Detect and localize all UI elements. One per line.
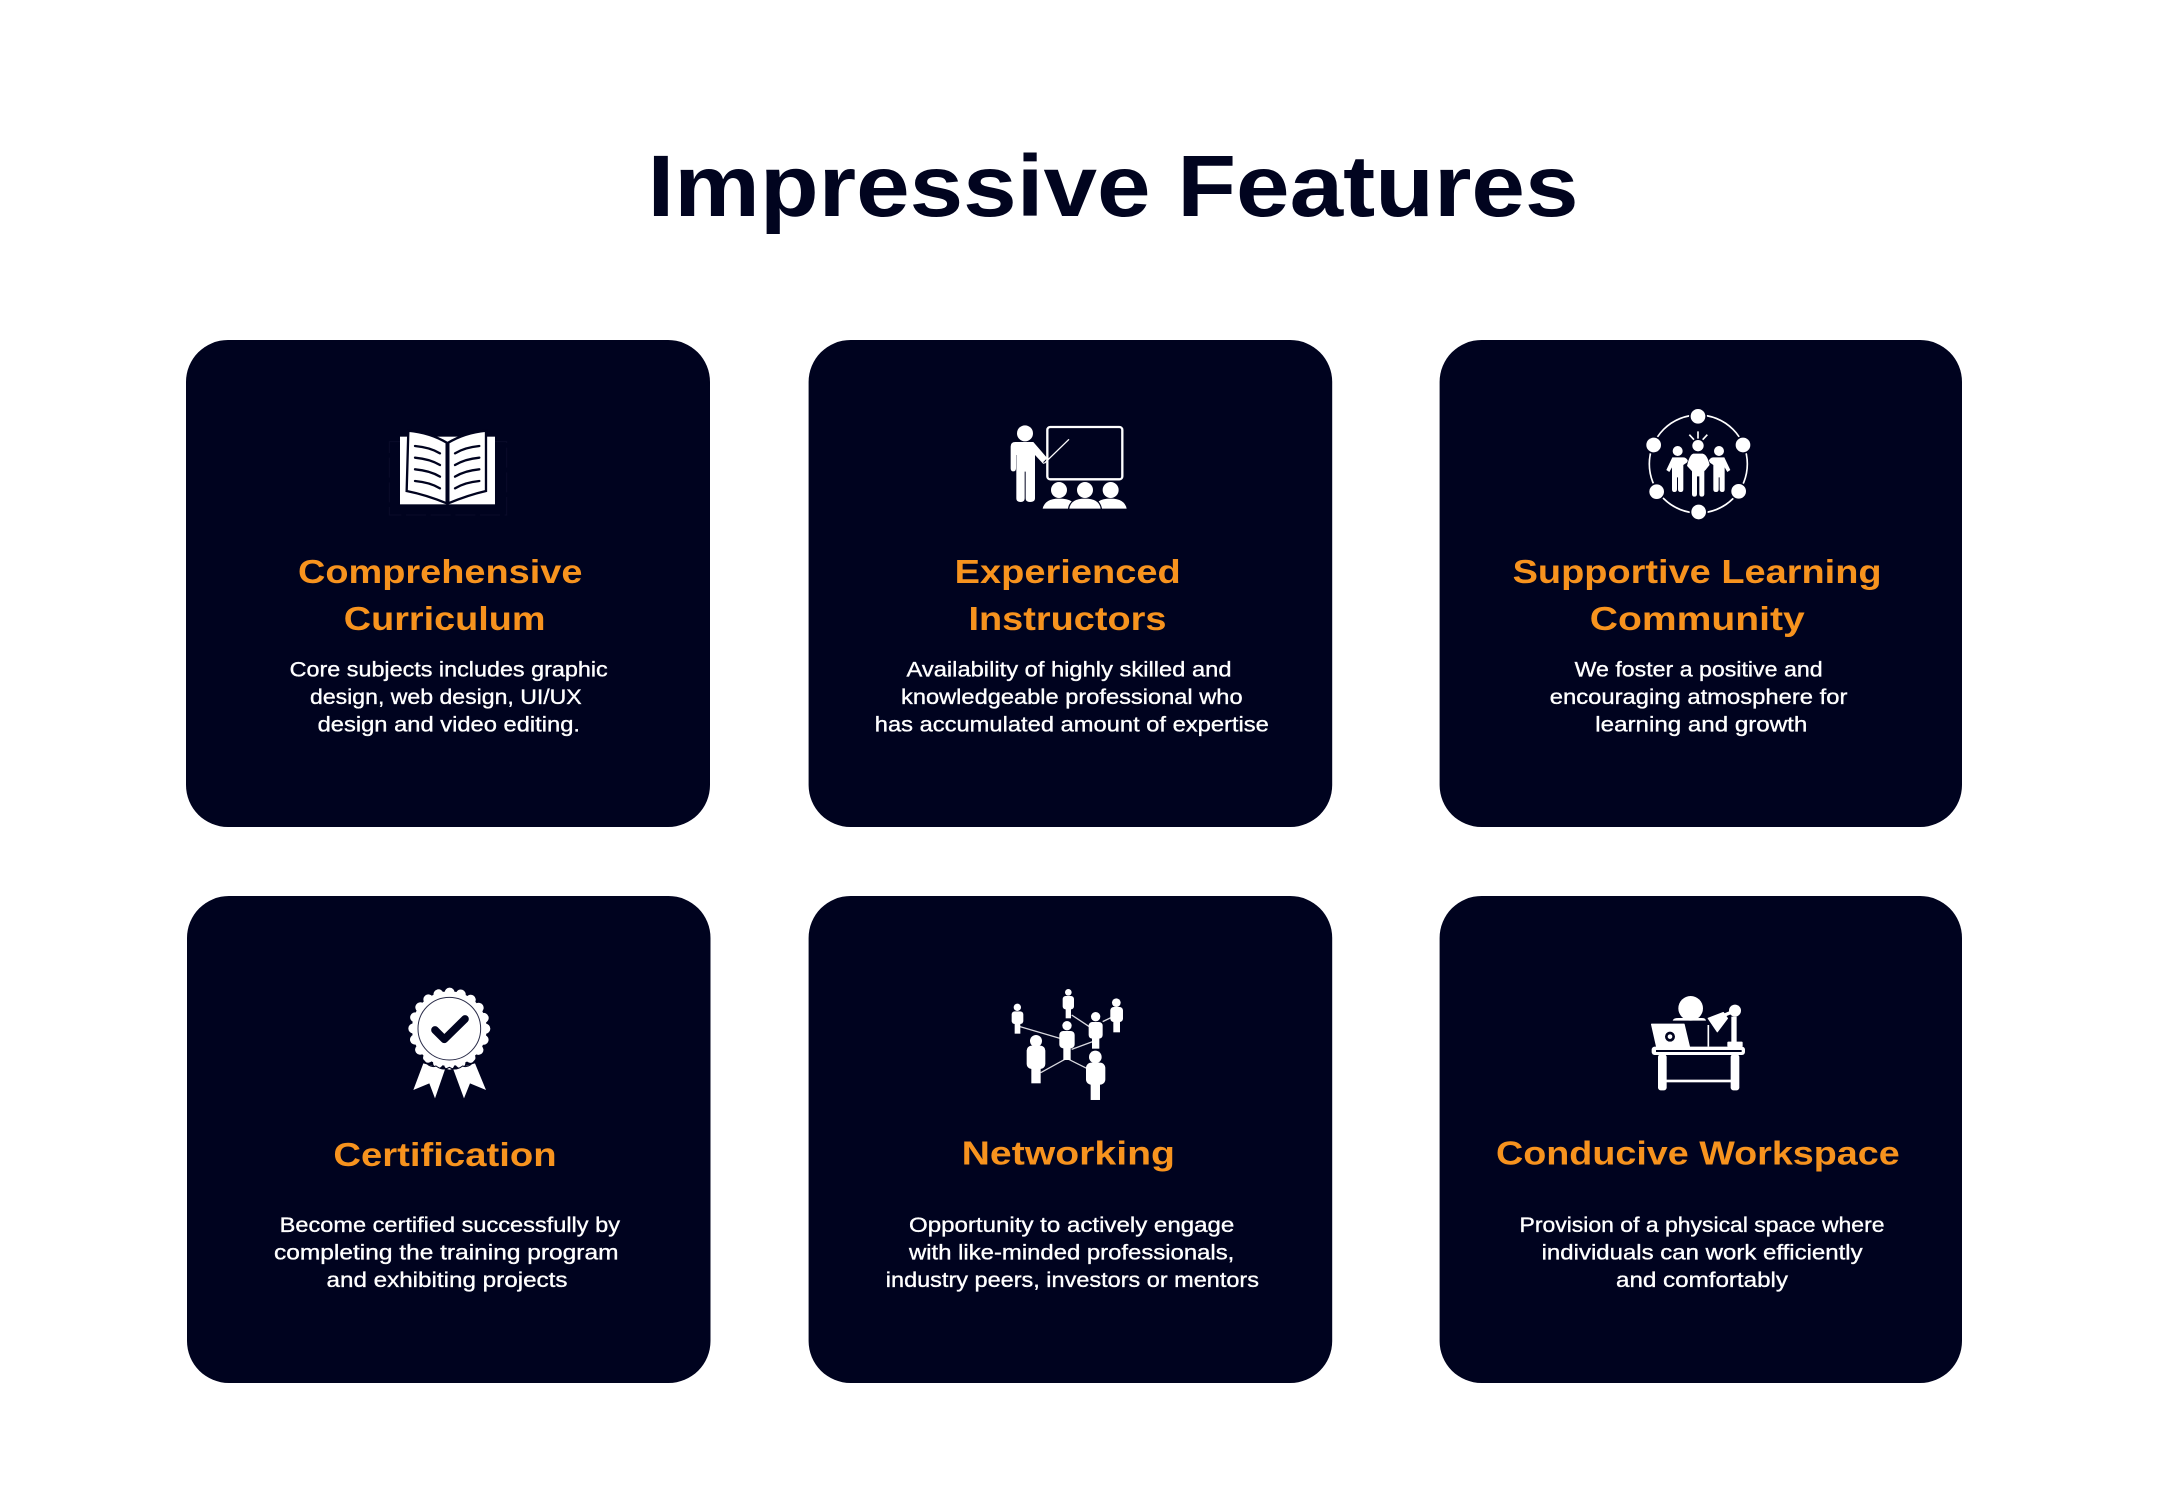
description: and exhibiting projects [326,1268,568,1292]
description: and comfortably [1616,1268,1788,1292]
heading: Networking [962,1134,1175,1172]
icon: people network [1012,989,1123,1100]
description: We foster a positive and [1575,658,1823,682]
heading: Experienced [955,553,1181,590]
panel: Certification [187,896,710,1383]
description: design, web design, UI/UX [310,685,582,709]
heading: Comprehensive [298,553,582,590]
panel: Conducive Workspace [1440,896,1962,1383]
panel: Experienced Instructors [809,340,1332,827]
description [1520,1213,1884,1292]
icon: instructor at board [1011,425,1127,509]
panel: Comprehensive Curriculum [186,340,710,827]
heading: Certification [333,1136,557,1173]
icon: award rosette [412,991,487,1098]
description: Provision of a physical space where [1520,1213,1884,1237]
title: Impressive Features [648,138,1578,235]
heading: Instructors [968,600,1166,637]
description: Opportunity to actively engage [909,1213,1234,1237]
description: individuals can work efficiently [1542,1240,1863,1264]
heading: Community [1590,600,1806,637]
description: Availability of highly skilled and [906,658,1232,682]
description: with like-minded professionals, [908,1240,1234,1264]
heading [955,553,1181,637]
description [1550,658,1847,736]
icon: person at desk [1652,996,1745,1090]
heading: Conducive Workspace [1496,1134,1900,1172]
description [875,658,1269,736]
icon: community circle [1645,407,1752,521]
panel: Networking [809,896,1332,1383]
description: industry peers, investors or mentors [886,1268,1259,1292]
description: knowledgeable professional who [901,685,1243,709]
description: has accumulated amount of expertise [875,712,1269,736]
heading [1513,553,1882,637]
panel: Supportive Learning Community [1440,340,1962,827]
description [886,1213,1259,1292]
heading: Supportive Learning [1513,553,1882,590]
description: encouraging atmosphere for [1550,685,1847,709]
icon: open book [389,431,507,515]
description [274,1213,620,1292]
description: design and video editing. [318,712,580,736]
description: Core subjects includes graphic [290,658,608,682]
description [290,658,608,736]
heading [298,553,582,637]
description: completing the training program [274,1240,618,1264]
heading: Curriculum [344,600,546,637]
description: Become certified successfully by [280,1213,620,1237]
description: learning and growth [1595,712,1807,736]
